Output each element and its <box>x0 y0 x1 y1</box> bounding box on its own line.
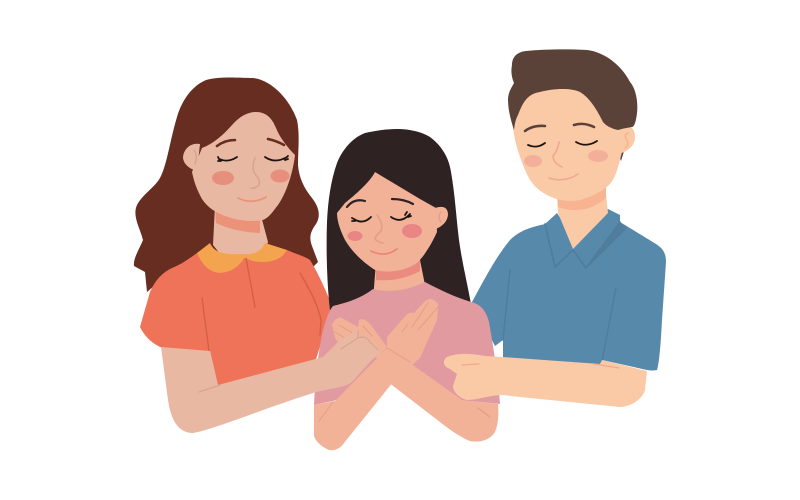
raised hand finger lines <box>319 303 438 421</box>
man ear <box>620 126 635 153</box>
man arm and hand on girl arm <box>444 354 647 407</box>
woman collar <box>197 243 287 273</box>
man hand and arm creases <box>462 364 619 368</box>
girl closed eyes <box>352 212 411 222</box>
man neck <box>557 185 608 249</box>
girl eyebrows <box>347 199 413 207</box>
man: body and head <box>472 49 666 371</box>
man shirt <box>472 209 666 370</box>
woman shirt <box>140 250 333 386</box>
girl left hand on chest <box>332 318 387 358</box>
man neck shadow <box>557 180 606 210</box>
man collar shading <box>503 222 627 361</box>
girl: body and head <box>314 129 500 405</box>
woman shirt seams <box>202 258 321 351</box>
woman face <box>192 112 295 221</box>
girl arm crossing to upper right with raised hand <box>314 299 438 450</box>
girl face <box>337 172 437 272</box>
man nose and mouth <box>549 142 578 180</box>
woman closed eyes <box>218 156 288 161</box>
girl arm crease right <box>478 408 490 417</box>
girl neck shadow <box>376 250 420 280</box>
woman eyebrows <box>217 139 284 146</box>
woman ear <box>183 144 200 171</box>
woman arm creases <box>199 331 378 392</box>
woman neck shadow <box>215 200 260 233</box>
man eyebrows <box>525 124 594 131</box>
girl finger lines <box>335 325 372 340</box>
girl hair <box>327 129 471 310</box>
woman cheeks <box>212 170 290 185</box>
girl arm reaching to lower right <box>375 345 498 442</box>
woman: body and head <box>134 78 333 386</box>
girl nose and mouth <box>371 215 397 254</box>
woman hair <box>134 78 319 292</box>
girl neck <box>373 255 428 300</box>
man hair <box>508 49 637 130</box>
man cheeks <box>524 150 608 167</box>
woman nose and mouth <box>238 158 266 201</box>
woman neck <box>213 205 268 260</box>
girl ear detail <box>439 212 441 222</box>
man hair behind ear <box>617 145 626 161</box>
girl cheeks <box>348 224 422 241</box>
girl shirt <box>314 282 500 405</box>
woman arm holding girl hand <box>161 330 380 433</box>
man ear detail <box>625 133 628 148</box>
man closed eyes <box>528 141 597 147</box>
woman ear detail <box>194 150 196 164</box>
man face <box>512 85 628 201</box>
girl ear <box>435 207 448 229</box>
